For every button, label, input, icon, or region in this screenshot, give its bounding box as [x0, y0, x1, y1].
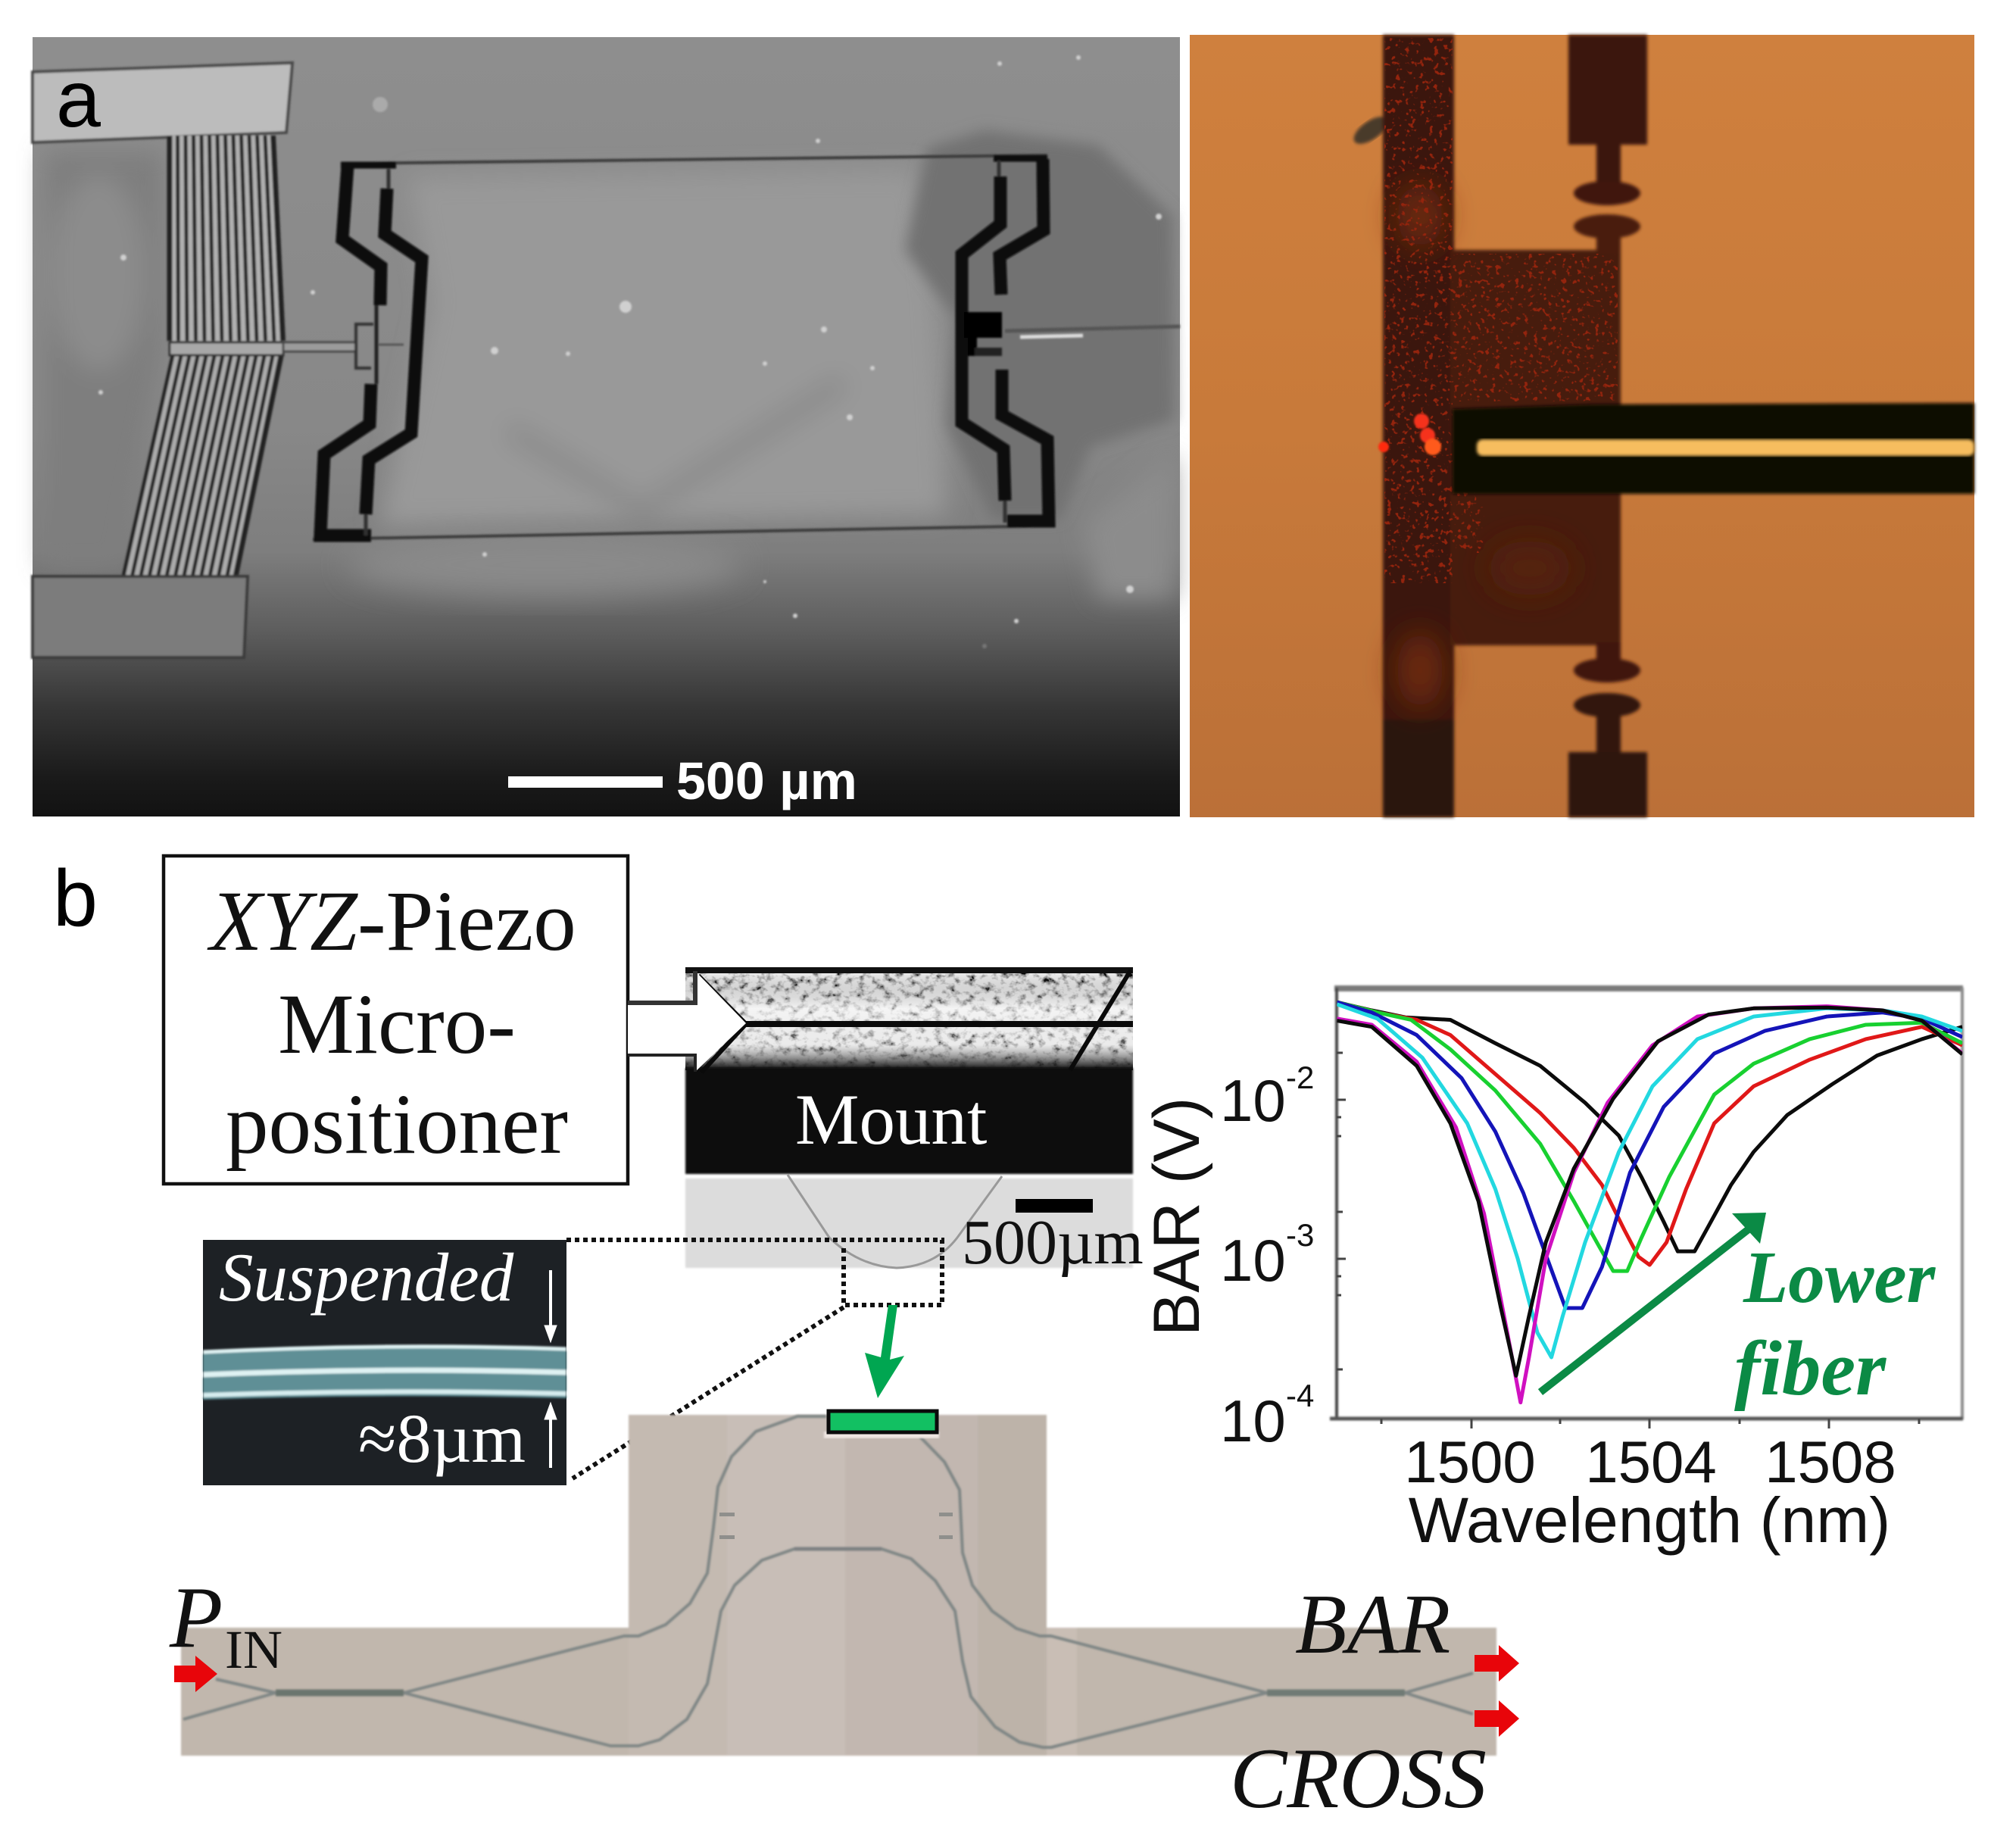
black fiber body [1453, 403, 1974, 494]
dotted zoom callout lines [566, 1240, 942, 1478]
label: Lower fiber: fiber [1734, 1325, 1886, 1412]
curve: blue [1337, 1002, 1962, 1308]
gap arrow down [545, 1270, 557, 1342]
axis ticks [1337, 1053, 1919, 1428]
darker blob around right flexure [905, 130, 1174, 519]
x axis tick labels: 1500 [1404, 1428, 1536, 1495]
x axis tick labels [1404, 1428, 1896, 1495]
y axis tick labels: -3 [1286, 1217, 1314, 1253]
SEM lower glow [348, 532, 742, 596]
holder top edge [685, 967, 1133, 973]
glow patches on metal [1397, 184, 1571, 708]
scale bar [1016, 1199, 1093, 1213]
black mount [685, 1068, 1133, 1174]
label: Lower fiber: Lower [1743, 1237, 1936, 1318]
arrow: BAR output red [1475, 1645, 1519, 1681]
orange substrate [1190, 35, 1974, 817]
inset: suspended fiber close-up [203, 1239, 566, 1485]
curve: red [1337, 1002, 1962, 1265]
fiber band [203, 1346, 566, 1400]
arrow: lower fiber direction [1540, 1213, 1766, 1392]
box: XYZ-Piezo Micro-positioner [164, 856, 628, 1184]
curve: green [1337, 1002, 1962, 1271]
y axis tick labels [1220, 1060, 1314, 1454]
label: P IN: P [169, 1569, 223, 1666]
box text: XYZ-Piezo [207, 874, 576, 969]
panel: a, SEM micrograph [33, 37, 1180, 816]
small alignment marks [719, 1513, 953, 1539]
optical fiber [1005, 326, 1180, 337]
y axis tick labels: 10 [1220, 1388, 1286, 1454]
panel: a, optical micrograph [1190, 35, 1974, 817]
label: BAR: BAR [1295, 1578, 1450, 1672]
y axis title: BAR (V) [1141, 1097, 1213, 1336]
plot area [1330, 988, 1963, 1428]
bottom contact pad [33, 576, 248, 657]
waveguides [183, 1416, 1473, 1747]
bright red laser spots [1378, 414, 1441, 455]
holder lines [698, 970, 1133, 1072]
spectral curves [1337, 1002, 1962, 1403]
SEM surface tone variations [45, 151, 1174, 598]
substrate smudge [1350, 111, 1392, 149]
arrow: input red [174, 1656, 217, 1692]
top contact pad [33, 63, 292, 142]
chart: BAR voltage vs wavelength [1141, 988, 1963, 1556]
SEM substrate background [33, 37, 1180, 816]
textured fiber holder [685, 967, 1133, 1070]
box: XYZ-Piezo Micro-positioner: positioner [226, 1077, 568, 1172]
label: P IN [169, 1569, 282, 1680]
right flexure assembly [962, 158, 1049, 523]
gap arrow up [545, 1403, 557, 1468]
Mount label: Mount [795, 1079, 987, 1160]
x axis title: Wavelength (nm) [1409, 1485, 1890, 1556]
curve: black, highest resonance [1337, 1002, 1962, 1251]
bright halo under marker [824, 1432, 939, 1438]
grey suspended region [685, 1179, 1133, 1268]
curve: cyan [1337, 1004, 1962, 1357]
y axis tick labels: -2 [1286, 1060, 1314, 1095]
fiber attachment block [964, 312, 1002, 356]
scale bar 500 um: 500 µm [676, 751, 857, 810]
comb actuator fingers [123, 136, 283, 576]
label: P IN: IN [225, 1619, 282, 1680]
curve: magenta [1337, 1007, 1962, 1403]
label: CROSS: CROSS [1230, 1731, 1487, 1826]
red scattered light speckle [1384, 38, 1618, 583]
box: XYZ-Piezo Micro-positioner: Micro- [278, 977, 516, 1072]
y axis tick labels: 10 [1220, 1227, 1286, 1294]
plot frame [1330, 988, 1963, 1419]
x axis tick labels: 1508 [1765, 1428, 1896, 1495]
arrow: white connector from piezo box to mount [628, 971, 746, 1072]
panel label a: a [56, 55, 101, 144]
dark metal structure [1383, 35, 1647, 817]
bright fiber core [1477, 439, 1974, 456]
y axis tick labels: 10 [1220, 1067, 1286, 1134]
suspended waveguide outline [788, 1175, 1002, 1268]
scale bar 500 um [508, 751, 857, 810]
green suspended section marker [829, 1411, 937, 1432]
device: Mach-Zehnder micrograph [181, 1411, 1496, 1756]
left flexure assembly [320, 165, 422, 535]
y axis tick labels: -4 [1286, 1378, 1314, 1413]
label: Lower fiber [1734, 1237, 1936, 1412]
mount micrograph [685, 967, 1144, 1278]
suspended frame thin edges [313, 155, 1055, 539]
holder washed highlight [685, 967, 1133, 1070]
comb central shuttle [170, 324, 404, 368]
device substrate [181, 1415, 1496, 1756]
x axis tick labels: 1504 [1585, 1428, 1717, 1495]
arrow: CROSS output red [1475, 1700, 1519, 1737]
arrow: green down to device [865, 1305, 904, 1398]
Suspended label: Suspended [219, 1239, 514, 1316]
SEM dust specks [98, 55, 1162, 648]
gap label: ≈8µm [358, 1400, 526, 1477]
curve: black, lowest resonance [1337, 1007, 1962, 1375]
scale label: 500µm [962, 1207, 1144, 1278]
panel label b: b [53, 854, 98, 943]
